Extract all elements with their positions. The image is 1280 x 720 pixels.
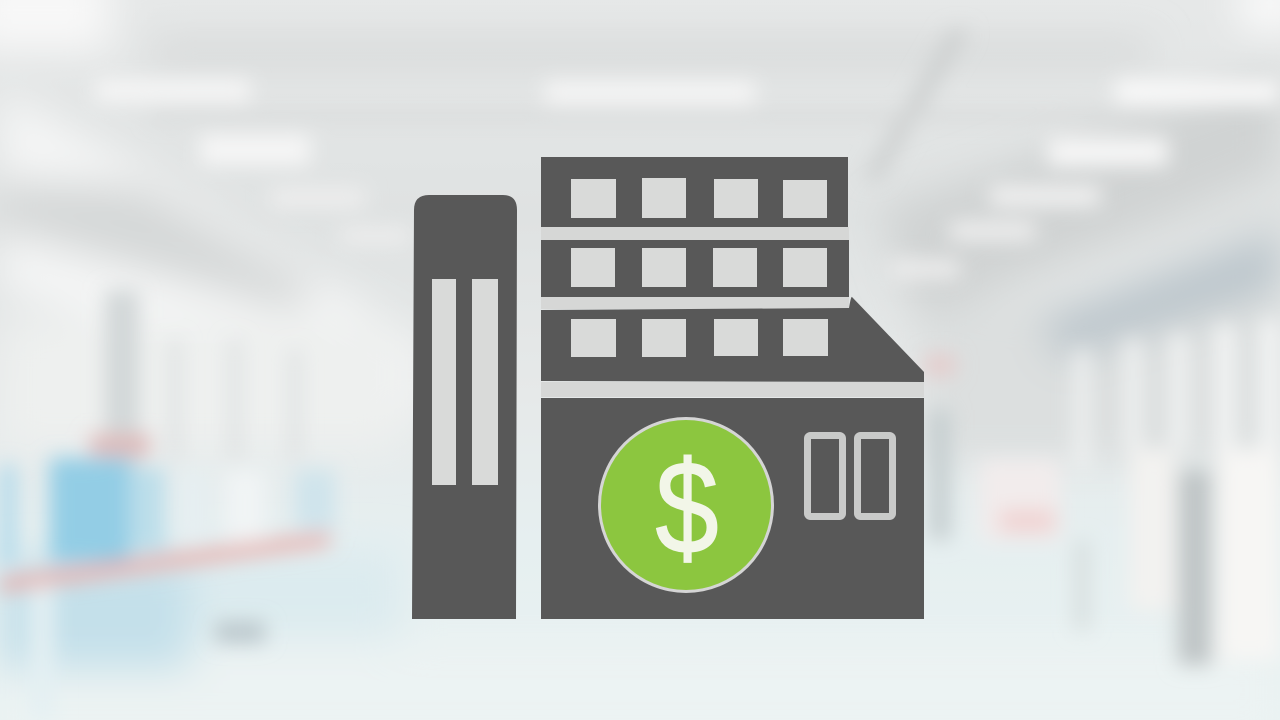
chimney tower xyxy=(412,195,517,619)
middle floor with windows xyxy=(541,240,849,297)
warehouse ceiling beams xyxy=(862,30,970,180)
columns on the left xyxy=(105,290,139,470)
floor separator bands xyxy=(541,227,924,397)
dollar badge: $ xyxy=(655,435,719,582)
lower floor with sloped roof and windows xyxy=(541,297,924,382)
machines and columns on the right xyxy=(1218,450,1280,660)
double door outlines xyxy=(808,436,892,516)
dollar badge xyxy=(598,417,774,593)
upper floor with windows xyxy=(541,157,848,227)
blue machines on the left xyxy=(50,458,130,563)
factory ground floor xyxy=(541,398,924,619)
